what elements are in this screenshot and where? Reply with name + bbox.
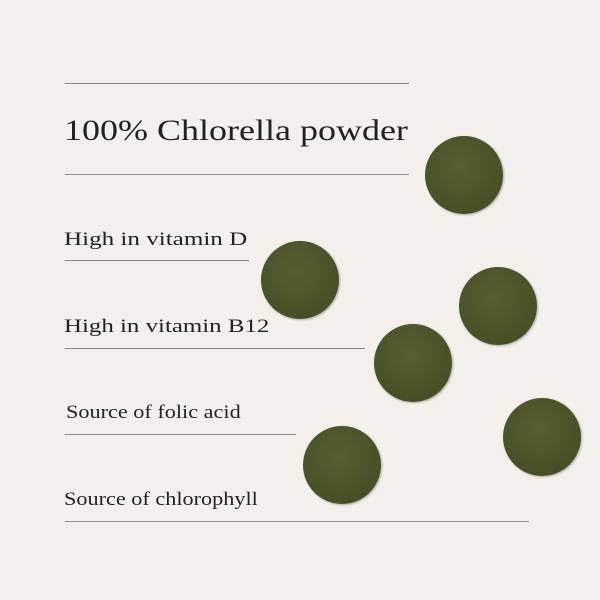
pill 4	[374, 324, 452, 402]
pill 6	[303, 426, 381, 504]
text: vitamin B12: High in vitamin B12	[64, 316, 269, 337]
pill 1	[425, 136, 503, 214]
pill 2	[261, 241, 339, 319]
text: chlorophyll: Source of chlorophyll	[64, 489, 258, 510]
text: vitamin D: High in vitamin D	[64, 229, 247, 250]
title: 100% Chlorella powder	[64, 114, 408, 147]
text: folic acid: Source of folic acid	[66, 402, 241, 423]
pill 3	[459, 267, 537, 345]
pill 5	[503, 398, 581, 476]
